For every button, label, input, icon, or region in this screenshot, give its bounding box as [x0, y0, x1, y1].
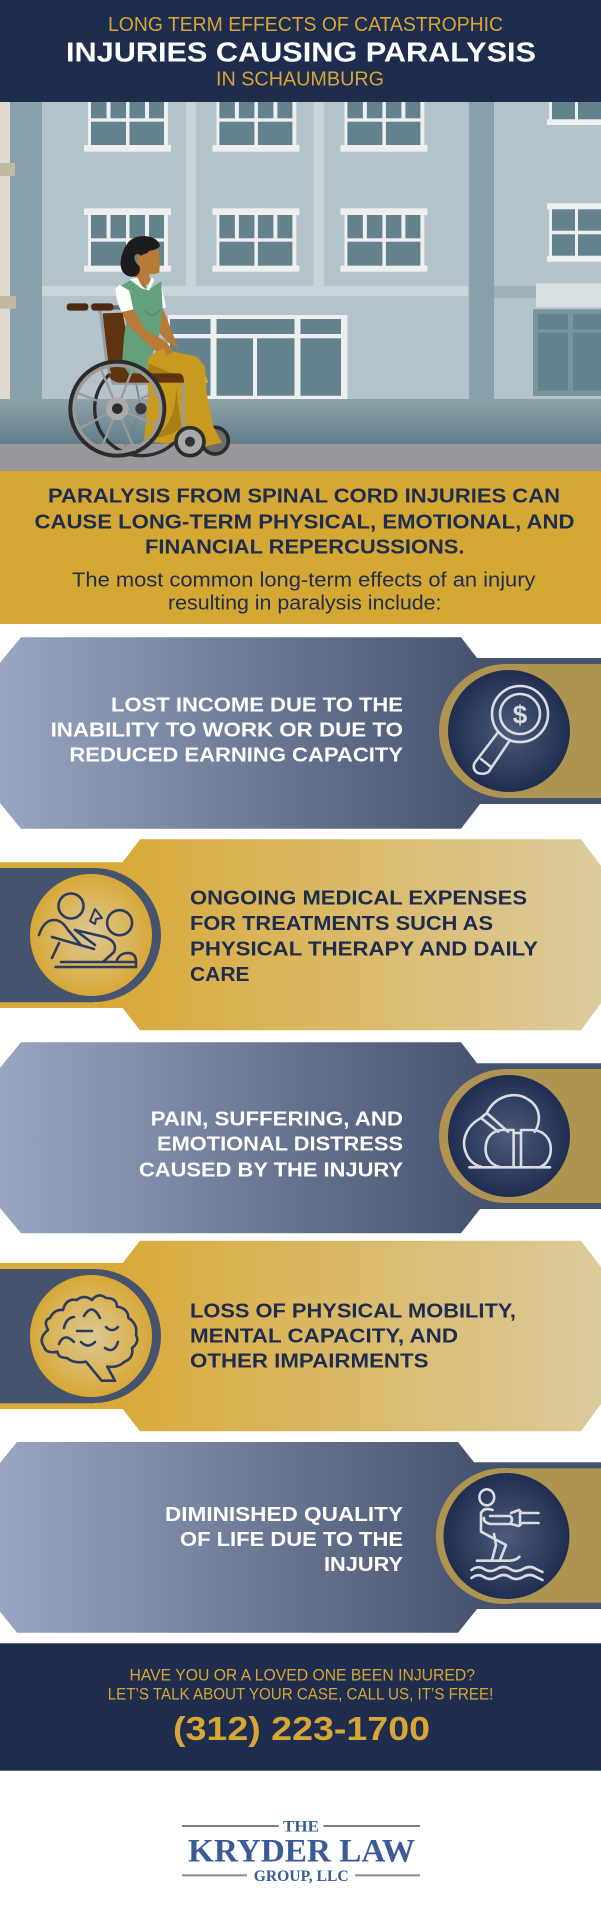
icon: physical therapy [39, 894, 136, 967]
panel: lost income [0, 637, 601, 829]
intro subtext: The most common long-term effects of an injury [72, 570, 536, 592]
logo [182, 1819, 420, 1885]
text: loss of mobility: MENTAL CAPACITY, AND [190, 1325, 458, 1347]
call to action text: HAVE YOU OR A LOVED ONE BEEN INJURED? [130, 1667, 475, 1685]
text: quality of life: DIMINISHED QUALITY [165, 1504, 404, 1526]
phone number: (312) 223-1700 [173, 1710, 430, 1747]
panel: loss of mobility [0, 1241, 601, 1431]
icon: magnifying glass with dollar [474, 686, 548, 774]
intro heading: PARALYSIS FROM SPINAL CORD INJURIES CAN [48, 486, 560, 508]
text: pain and suffering: PAIN, SUFFERING, AND [151, 1108, 403, 1130]
street scene illustration [0, 102, 601, 471]
sidewalk [0, 399, 601, 444]
text: loss of mobility: LOSS OF PHYSICAL MOBILITY, [190, 1300, 516, 1322]
call to action text [108, 1667, 493, 1703]
panel: medical expenses [0, 839, 601, 1030]
panel: pain and suffering [0, 1042, 601, 1233]
logo: KRYDER LAW [188, 1834, 415, 1870]
call to action text: LET’S TALK ABOUT YOUR CASE, CALL US, IT’S FREE! [108, 1685, 493, 1703]
woman in wheelchair [67, 236, 228, 456]
logo: THE [283, 1819, 319, 1836]
text: loss of mobility: OTHER IMPAIRMENTS [190, 1350, 428, 1372]
header banner [0, 0, 601, 102]
footer call to action [0, 1643, 601, 1771]
text: lost income: REDUCED EARNING CAPACITY [69, 745, 404, 767]
road [0, 444, 601, 471]
right side windows [547, 102, 601, 262]
upper windows [84, 102, 427, 272]
text: quality of life: INJURY [324, 1554, 404, 1576]
icon: magnifying glass with dollar: $ [513, 700, 528, 730]
logo: GROUP, LLC [254, 1868, 349, 1885]
icon: brain [42, 1295, 137, 1381]
text: medical expenses: FOR TREATMENTS SUCH AS [190, 913, 493, 935]
right side door [533, 309, 601, 396]
text: lost income: INABILITY TO WORK OR DUE TO [51, 720, 403, 742]
intro heading: CAUSE LONG-TERM PHYSICAL, EMOTIONAL, AND [34, 512, 574, 534]
intro subtext: resulting in paralysis include: [168, 592, 442, 614]
intro heading [34, 486, 574, 558]
text: pain and suffering [139, 1108, 404, 1182]
intro panel [0, 471, 601, 624]
panel: diminished quality of life [0, 1442, 601, 1633]
text: medical expenses [190, 888, 539, 986]
main title: INJURIES CAUSING PARALYSIS [66, 37, 536, 68]
intro heading: FINANCIAL REPERCUSSIONS. [145, 536, 464, 558]
icon: pills [464, 1095, 551, 1167]
text: medical expenses: PHYSICAL THERAPY AND DAILY [190, 938, 539, 960]
text: lost income [51, 695, 404, 767]
text: quality of life [165, 1504, 404, 1576]
icon: water skier [472, 1489, 542, 1580]
ground floor window [168, 315, 347, 399]
text: loss of mobility [190, 1300, 516, 1372]
text: medical expenses: ONGOING MEDICAL EXPENSES [190, 888, 527, 910]
text: quality of life: OF LIFE DUE TO THE [180, 1529, 403, 1551]
text: lost income: LOST INCOME DUE TO THE [111, 695, 403, 717]
title line 1: LONG TERM EFFECTS OF CATASTROPHIC [108, 14, 503, 36]
intro subtext [72, 570, 536, 614]
text: medical expenses: CARE [190, 964, 250, 986]
text: pain and suffering: EMOTIONAL DISTRESS [157, 1134, 403, 1156]
text: pain and suffering: CAUSED BY THE INJURY [139, 1160, 404, 1182]
title line 3: IN SCHAUMBURG [216, 68, 384, 90]
